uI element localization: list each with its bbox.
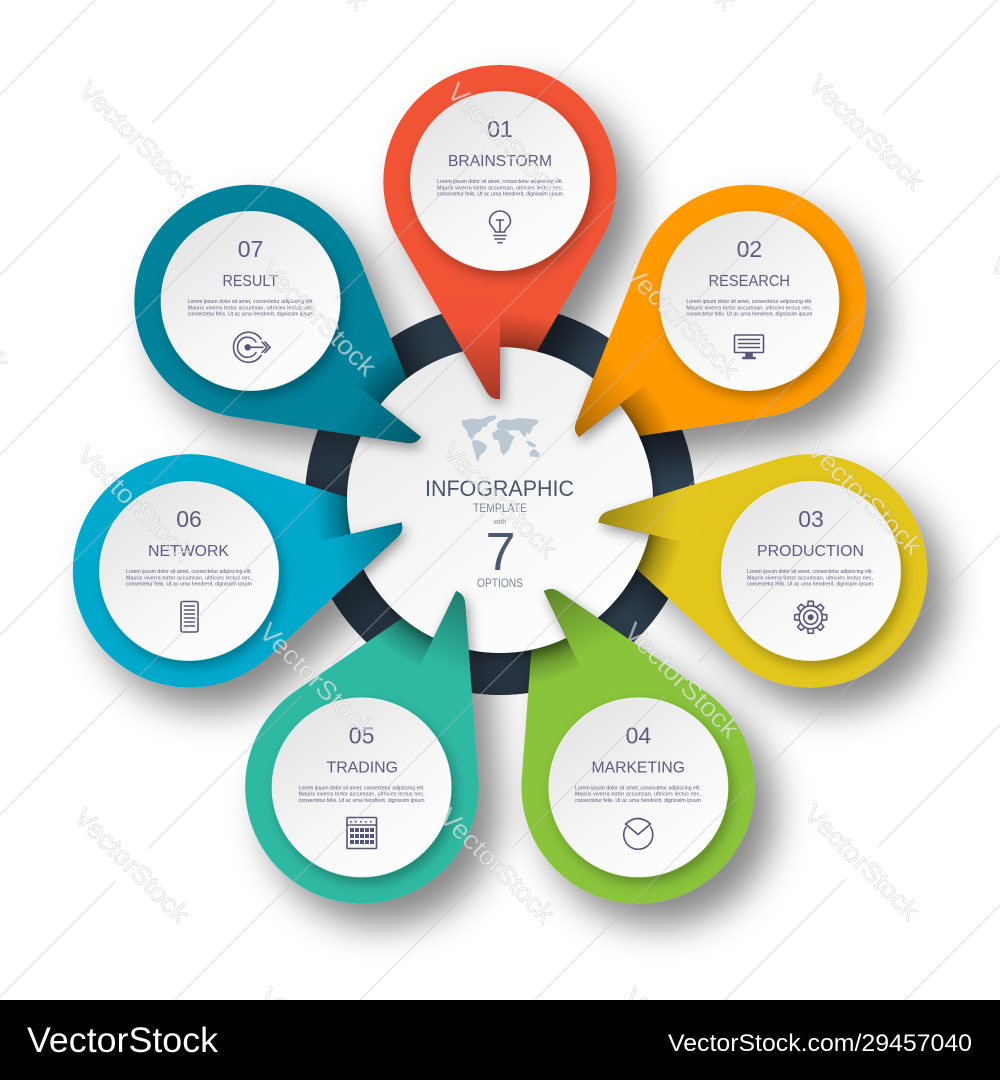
body text: consectetur felis. Ut ac urna hendrerit, dignissim ipsum [747,582,873,588]
subheading: TEMPLATE [473,501,527,515]
pin tail shadows on center circle [350,347,653,652]
tail 01 [434,300,500,399]
body text: Mauris viverra tortor accumsan, ultricies lectus nec, [299,792,425,798]
body text: Lorem ipsum dolor sit amet, consectetur adipiscing elit. [437,179,563,185]
icon: target [233,332,270,362]
watermarks: VectorStock [436,436,564,565]
pin bodies with cast shadow [50,65,950,943]
body text: Lorem ipsum dolor sit amet, consectetur adipiscing elit. [747,569,873,575]
body text: Mauris viverra tortor accumsan, ultricies lectus nec, [747,575,873,581]
footer url: VectorStock.com/29457040 [668,1030,972,1057]
pin 03 body [557,405,950,711]
watermarks: VectorStock [433,801,561,930]
footer logo: VectorStock [27,1021,219,1060]
pin 06 body [50,405,443,711]
body text: Lorem ipsum dolor sit amet, consectetur adipiscing elit. [686,299,812,305]
disc [272,698,451,877]
title: PRODUCTION [757,543,864,560]
title: BRAINSTORM [448,153,552,170]
tail 05 [413,591,516,709]
watermarks: VectorStock [618,257,746,386]
center text block [425,415,574,590]
body text: consectetur felis. Ut ac urna hendrerit, dignissim ipsum [686,312,812,318]
body text: consectetur felis. Ut ac urna hendrerit, dignissim ipsum [575,798,701,804]
body text: Mauris viverra tortor accumsan, ultricies lectus nec, [686,305,812,311]
title: MARKETING [592,759,685,776]
disc [410,92,590,270]
option 02: research [660,212,839,390]
watermarks: VectorStock [798,798,926,927]
body text: consectetur felis. Ut ac urna hendrerit, dignissim ipsum [126,582,252,588]
pin 04 body [432,526,794,943]
icon: calendar [347,818,376,848]
watermarks: VectorStock [71,439,199,568]
watermarks: VectorStock [255,254,383,383]
option 06: network [100,482,278,660]
center circle [347,347,653,653]
disc [549,698,728,877]
pin 07 body [87,137,506,538]
option 01: brainstorm [410,92,590,270]
disc [100,482,278,660]
title: NETWORK [148,543,229,560]
icon: light bulb [490,211,510,243]
body text: Lorem ipsum dolor sit amet, consectetur adipiscing elit. [575,785,701,791]
with: with [493,519,506,526]
notch shadows on pins [304,312,684,695]
body text [188,299,314,318]
options label: OPTIONS [477,578,523,590]
pin 05 body [206,526,568,943]
body text [686,299,812,318]
body text: consectetur felis. Ut ac urna hendrerit, dignissim ipsum [299,798,425,804]
body text: Lorem ipsum dolor sit amet, consectetur adipiscing elit. [188,299,314,305]
title: RESEARCH [708,273,790,290]
option 05: trading [272,698,451,877]
number: 01 [487,116,513,142]
dark ring [300,285,721,716]
tail 06 [305,522,416,609]
body text: Lorem ipsum dolor sit amet, consectetur adipiscing elit. [126,569,252,575]
tail 07 [302,375,421,489]
icon: pie chart [624,818,653,849]
footer banner [0,1000,1000,1080]
body text [575,785,701,804]
pin 02 body [494,137,913,538]
watermarks: VectorStock [73,74,201,203]
option 07: result [161,212,340,390]
option 04: marketing [549,698,728,877]
body text: Mauris viverra tortor accumsan, ultricies lectus nec, [126,575,252,581]
icon: world map [462,415,540,462]
number: 03 [798,506,824,532]
number: 06 [176,506,202,532]
watermarks: VectorStock [618,616,746,745]
number: 07 [238,236,263,262]
watermarks: VectorStock [803,68,931,197]
icon: device [181,602,198,632]
body text [299,785,425,804]
number: 05 [349,722,374,748]
option count: 7 [485,522,516,582]
number: 04 [626,722,651,748]
disc [161,212,340,390]
tail 03 [598,458,710,545]
body text: Lorem ipsum dolor sit amet, consectetur adipiscing elit. [299,785,425,791]
watermarks: VectorStock [441,76,569,205]
body text: consectetur felis. Ut ac urna hendrerit, dignissim ipsum [437,192,563,198]
disc [722,482,900,660]
title: RESULT [222,273,278,290]
body text [747,569,873,588]
number: 02 [737,236,762,262]
body text: Mauris viverra tortor accumsan, ultricies lectus nec, [575,792,701,798]
option 03: production [722,482,900,660]
heading: INFOGRAPHIC [425,476,574,501]
body text: Mauris viverra tortor accumsan, ultricies lectus nec, [437,185,563,191]
icon: gear [795,601,827,633]
watermarks: VectorStock [253,616,381,745]
body text: Mauris viverra tortor accumsan, ultricies lectus nec, [188,305,314,311]
tail 04 [544,562,647,680]
title: TRADING [326,759,398,776]
watermarks: VectorStock [801,433,929,562]
body text [437,179,563,198]
pin tails [302,300,710,709]
pin 01 body [383,65,617,415]
disc [660,212,839,390]
watermarks: VectorStock [68,801,196,930]
body text [126,569,252,588]
body text: consectetur felis. Ut ac urna hendrerit, dignissim ipsum [188,312,314,318]
tail 02 [538,323,656,437]
icon: monitor [734,335,764,358]
